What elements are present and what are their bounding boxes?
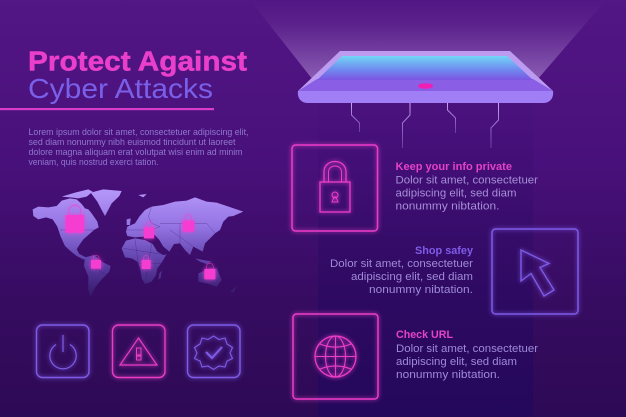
intro paragraph: veniam, quis nostrud exerci tation. [28, 157, 158, 167]
panel: check url [293, 314, 538, 399]
description: Dolor sit amet, consectetuer [396, 174, 538, 186]
heading: Shop safey [415, 245, 474, 257]
title [28, 46, 247, 104]
description [330, 258, 473, 296]
icon: warning triangle [112, 325, 165, 378]
lock: South America [91, 255, 101, 269]
icon: power button [36, 325, 89, 378]
description: Dolor sit amet, consectetuer [330, 258, 473, 270]
lock: North America [66, 205, 84, 233]
lock: Asia [183, 214, 194, 232]
tablet device [298, 51, 553, 103]
icon: padlock box [292, 145, 378, 231]
heading: Check URL [396, 329, 453, 341]
panel: keep your info private [292, 145, 538, 231]
description: adipiscing elit, sed diam [351, 271, 473, 283]
lock: Europe [144, 222, 154, 238]
circuit wires [352, 103, 498, 148]
intro paragraph: dolore magna aliquam erat volutpat wisi enim ad minim [28, 147, 243, 157]
intro paragraph: Lorem ipsum dolor sit amet, consectetuer adipiscing elit, [28, 127, 248, 137]
title underline [0, 108, 214, 110]
title line 2: Cyber Attacks [28, 73, 213, 104]
icon: cursor arrow box [492, 229, 578, 314]
intro paragraph: sed diam nonummy nibh euismod tincidunt ut laoreet [28, 137, 236, 147]
panel: shop safely [330, 229, 578, 314]
heading: Keep your info private [396, 161, 512, 173]
map locks [66, 205, 215, 279]
lock: Australia [204, 263, 215, 279]
description: nonummy nibtation. [396, 200, 500, 212]
tablet base strip [298, 91, 553, 103]
description: Dolor sit amet, consectetuer [396, 343, 538, 355]
description: nonummy nibtation. [396, 369, 500, 381]
description: nonummy nibtation. [369, 284, 473, 296]
description: adipiscing elit, sed diam [396, 356, 517, 368]
description [396, 343, 538, 381]
tablet frame [298, 51, 553, 91]
light beam from tablet [250, 0, 606, 80]
description: adipiscing elit, sed diam [396, 188, 516, 200]
title line 1: Protect Against [28, 46, 247, 76]
intro paragraph [28, 127, 248, 167]
icon: verified badge [188, 325, 240, 378]
tablet screen [317, 56, 533, 80]
country borders [60, 207, 215, 284]
tablet lower body [298, 79, 553, 91]
world map [33, 189, 243, 297]
icon: globe box [293, 314, 378, 399]
description [396, 174, 538, 212]
tablet pink button [418, 83, 433, 89]
continents [33, 189, 243, 297]
lock: Africa [142, 255, 151, 269]
